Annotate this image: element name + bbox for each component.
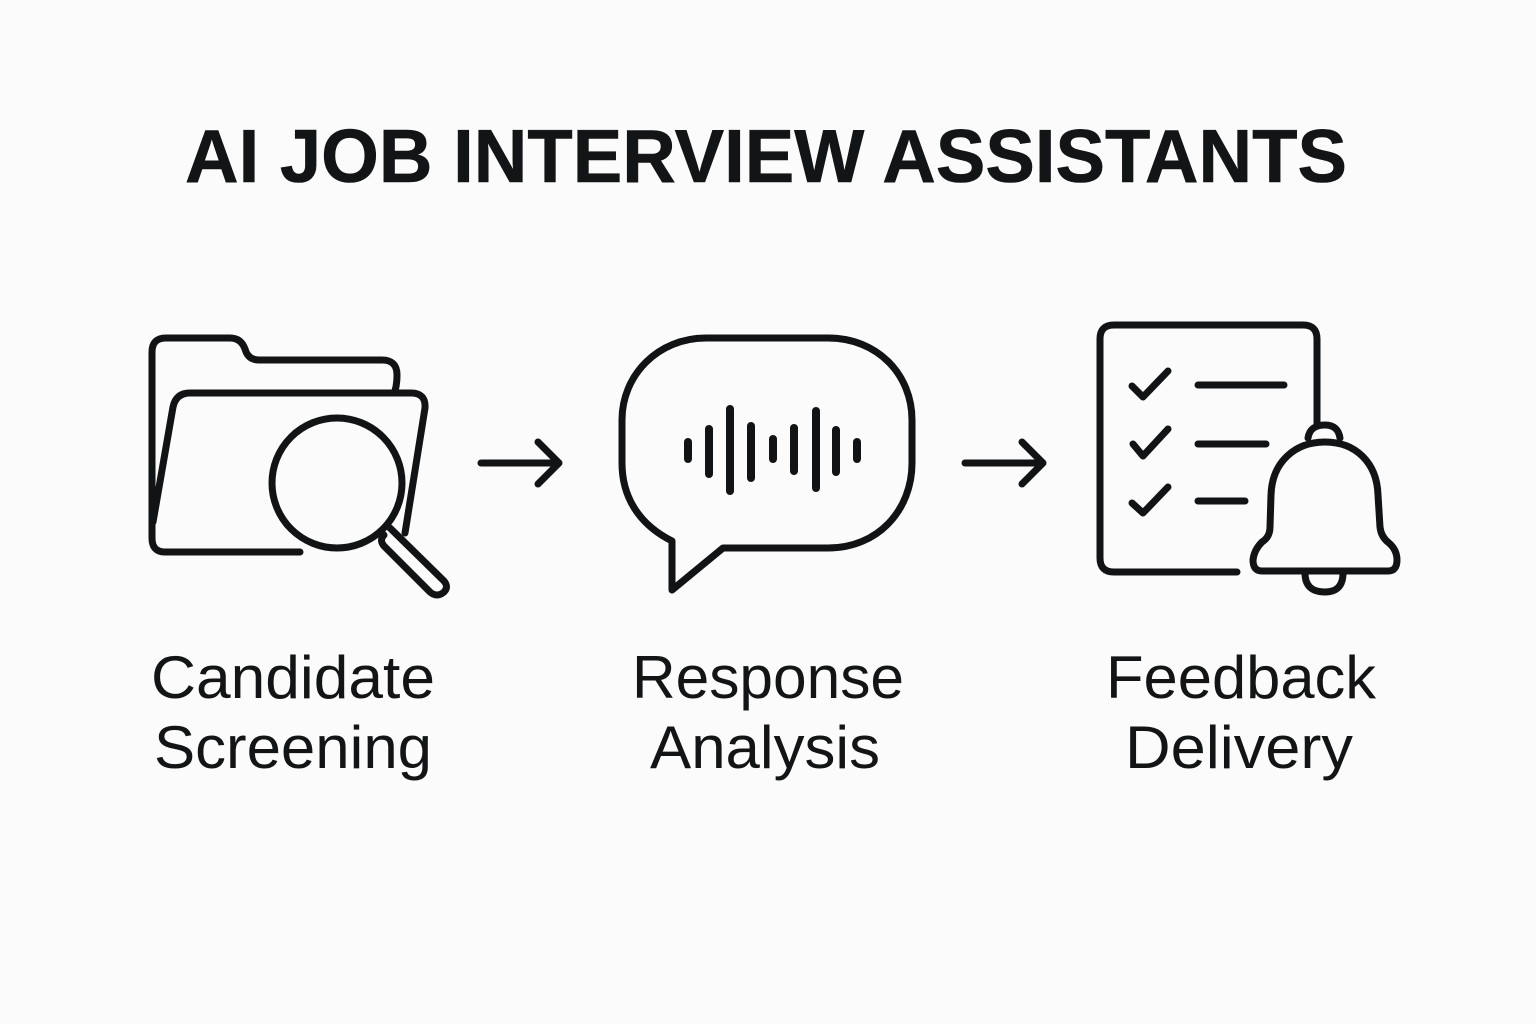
- label: response analysis: Response: [632, 644, 904, 711]
- arrow: analysis to feedback: [965, 442, 1043, 484]
- label: candidate screening: Candidate: [151, 644, 435, 711]
- label: feedback delivery: Delivery: [1125, 714, 1353, 781]
- label: candidate screening: Screening: [154, 714, 432, 781]
- icon: checklist with bell: [1100, 325, 1397, 592]
- label: response analysis: [632, 644, 904, 781]
- label: feedback delivery: [1106, 644, 1377, 781]
- title: AI JOB INTERVIEW ASSISTANTS: [185, 114, 1347, 198]
- icon: speech bubble with sound wave: [622, 338, 912, 590]
- icon: folder with magnifying glass: [152, 338, 446, 595]
- arrow: screening to analysis: [481, 442, 559, 484]
- label: response analysis: Analysis: [650, 714, 880, 781]
- label: feedback delivery: Feedback: [1106, 644, 1377, 711]
- label: candidate screening: [151, 644, 435, 781]
